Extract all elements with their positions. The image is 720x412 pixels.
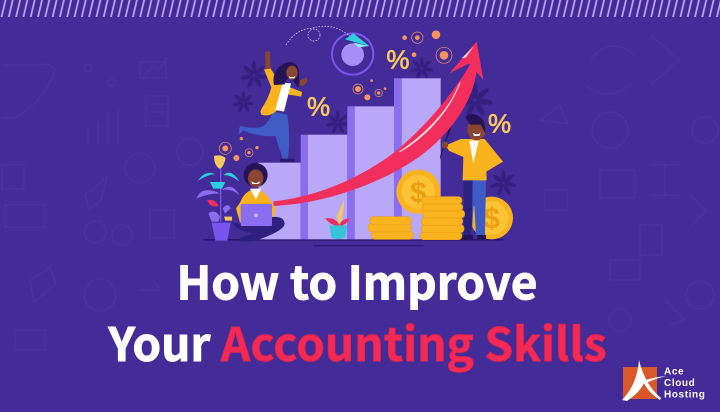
person: man with pointer xyxy=(440,114,503,240)
orange dots xyxy=(222,30,448,161)
percent signs: % xyxy=(488,108,511,138)
coin behind man xyxy=(470,197,513,239)
logo text: Hosting xyxy=(664,390,705,400)
percent signs xyxy=(307,45,511,138)
person: seated woman with laptop xyxy=(232,163,285,241)
coin behind man: $ xyxy=(484,203,500,236)
title line 2: Your Accounting Skills xyxy=(107,309,607,375)
percent signs: % xyxy=(386,45,409,75)
top striped band xyxy=(0,0,720,17)
ground shadow xyxy=(203,239,503,241)
decorative leaves xyxy=(232,57,517,196)
logo mark xyxy=(622,360,666,401)
title xyxy=(107,248,607,375)
illustration: growth chart with people xyxy=(197,26,517,246)
title line 1: How to Improve xyxy=(176,248,538,314)
potted plant xyxy=(197,155,239,241)
paper plane orbit xyxy=(286,26,373,75)
logo: Ace Cloud Hosting xyxy=(622,360,705,401)
person: jumping woman xyxy=(238,52,307,162)
potted flower xyxy=(325,200,350,239)
coin stacks xyxy=(368,170,465,240)
faint background icons xyxy=(2,35,718,350)
logo text: Cloud xyxy=(664,378,695,389)
red growth arrow xyxy=(273,41,483,206)
bar chart steps xyxy=(258,78,441,239)
logo text: Ace xyxy=(664,366,684,378)
percent signs: % xyxy=(307,92,330,122)
logo text xyxy=(664,366,705,400)
coin stacks: $ xyxy=(410,176,426,209)
